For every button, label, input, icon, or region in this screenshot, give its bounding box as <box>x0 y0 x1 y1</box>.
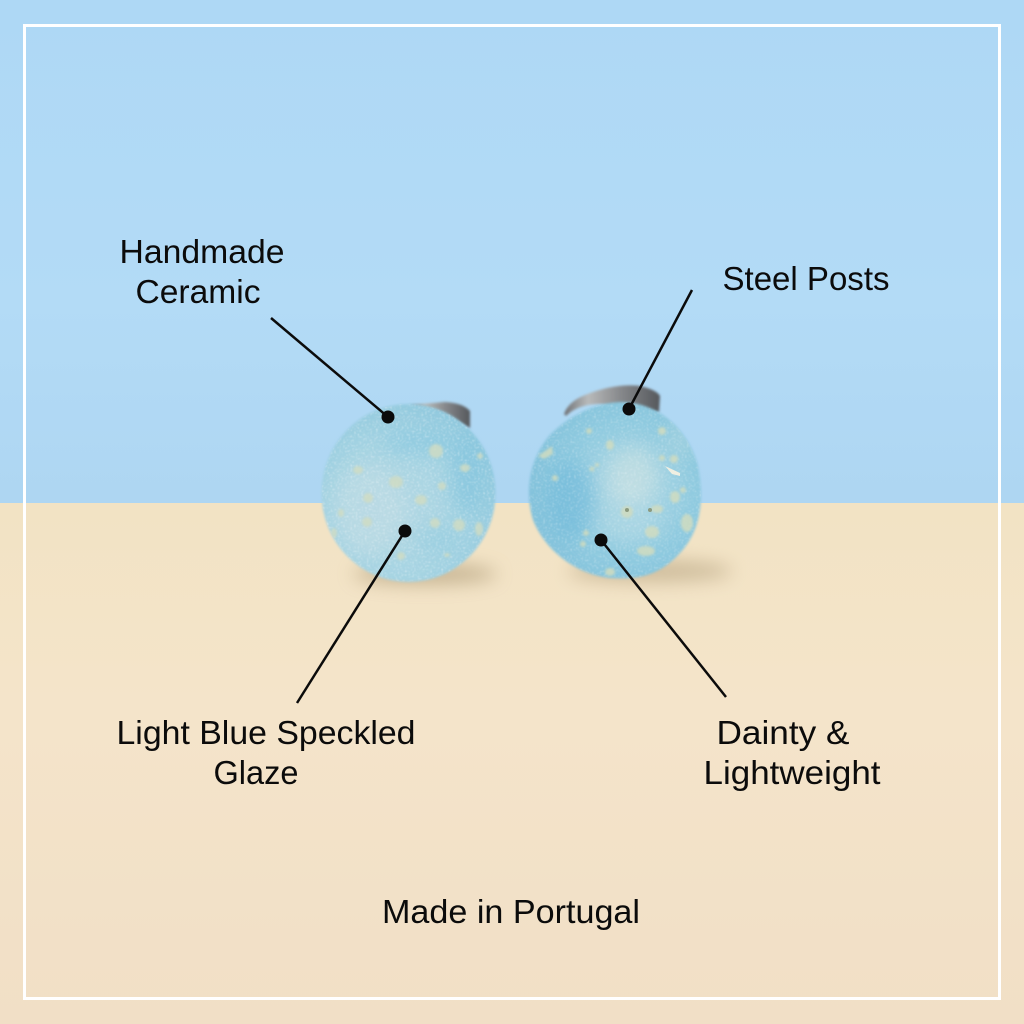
left earring shadow <box>353 564 497 584</box>
footer text: Made in Portugal: Made in Portugal <box>382 893 640 930</box>
icon: right earring <box>526 385 704 582</box>
callout: Dainty & Lightweight: Lightweight <box>704 754 880 791</box>
background: blue upper wall <box>0 0 1024 503</box>
right ceramic disc <box>529 402 701 578</box>
callout: Dainty & Lightweight <box>594 534 880 791</box>
callout: Dainty & Lightweight: Dainty & <box>716 714 850 751</box>
callout: Light Blue Speckled Glaze <box>116 524 416 791</box>
left speckles <box>331 444 483 560</box>
callout: Handmade Ceramic <box>120 233 394 424</box>
left steel post <box>410 402 470 428</box>
right earring shadow <box>568 560 732 582</box>
callout: Light Blue Speckled Glaze: Glaze <box>214 754 298 791</box>
bright chip <box>665 466 680 476</box>
callout: Light Blue Speckled Glaze: Light Blue Speckled <box>116 714 416 751</box>
callout: Steel Posts <box>622 260 890 416</box>
background: cream lower surface <box>0 503 1024 1024</box>
icon: left earring <box>320 402 498 584</box>
callout: Steel Posts: Steel Posts <box>722 260 890 297</box>
dark pits <box>625 508 629 512</box>
right steel post <box>564 385 660 416</box>
left surface grain <box>320 402 498 584</box>
callout: Handmade Ceramic: Ceramic <box>136 273 260 310</box>
left ceramic disc <box>322 404 496 582</box>
callout: Handmade Ceramic: Handmade <box>120 233 284 270</box>
right speckles <box>538 427 693 576</box>
right surface grain <box>526 400 704 582</box>
